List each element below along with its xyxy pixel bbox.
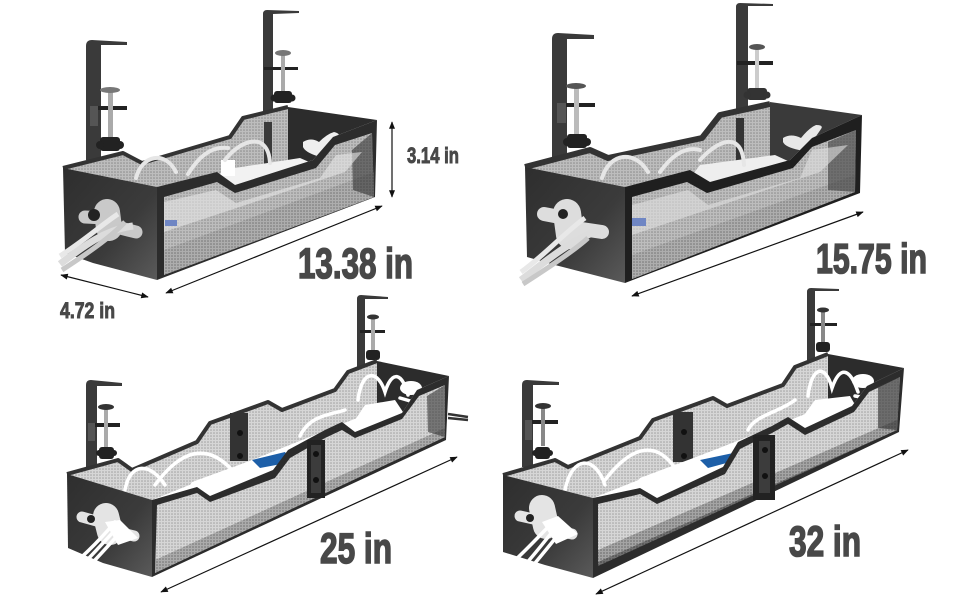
right end wall with heart cut-out bbox=[770, 102, 862, 168]
arrow: length bbox=[166, 206, 382, 293]
keyhole cut-out bbox=[520, 508, 572, 534]
left end panel bbox=[67, 474, 152, 577]
clamp: back left bbox=[86, 380, 122, 467]
back mesh wall bbox=[525, 102, 770, 187]
back bracket bbox=[230, 413, 248, 461]
front mesh panel bbox=[152, 376, 449, 577]
back rail bbox=[63, 107, 288, 168]
right end wall with heart cut-out bbox=[288, 107, 377, 168]
inner bracket bbox=[264, 122, 272, 167]
power strip and cables bbox=[136, 142, 316, 190]
arrow: length bbox=[632, 212, 863, 296]
power strips and cables bbox=[565, 371, 890, 498]
cables exiting bbox=[55, 520, 138, 596]
arrow: length bbox=[161, 457, 457, 592]
back bracket bbox=[673, 412, 693, 462]
clamp: back left bbox=[86, 40, 127, 160]
product: 15.75 inch tray bbox=[521, 3, 927, 296]
back rail bbox=[525, 104, 770, 167]
back mesh wall bbox=[67, 361, 377, 500]
cable end at right bbox=[448, 414, 468, 420]
left end panel bbox=[63, 168, 157, 280]
product: 13.38 inch tray bbox=[60, 10, 459, 323]
left end panel bbox=[525, 167, 625, 283]
keyhole cut-out bbox=[85, 209, 136, 232]
clamp: back left bbox=[522, 380, 559, 467]
front mesh panel bbox=[625, 115, 862, 283]
label: width: 4.72 in bbox=[60, 298, 115, 323]
label: height: 3.14 in bbox=[407, 143, 459, 168]
keyhole cut-out bbox=[544, 209, 602, 235]
cables exiting bbox=[60, 214, 133, 270]
power strip and cables bbox=[602, 142, 790, 185]
product: 32 inch tray bbox=[500, 288, 908, 598]
arrow: height bbox=[391, 122, 393, 197]
cables exiting bbox=[521, 218, 600, 284]
label: length: 13.38 in bbox=[298, 240, 413, 288]
label: length: 32 in bbox=[789, 518, 861, 566]
product: 25 inch tray bbox=[55, 295, 468, 596]
left end panel bbox=[503, 475, 593, 578]
front mesh panel bbox=[593, 368, 904, 578]
power strips and cables bbox=[125, 376, 434, 500]
back mesh wall bbox=[63, 107, 288, 187]
right end wall with cut-out bbox=[828, 354, 904, 420]
front bracket bbox=[753, 435, 775, 500]
clamp: back right bbox=[807, 288, 839, 360]
arrow: length bbox=[596, 450, 908, 594]
front mesh panel bbox=[157, 120, 377, 280]
label: length: 25 in bbox=[320, 525, 392, 573]
right end wall with cut-out bbox=[377, 361, 449, 425]
front bracket bbox=[307, 440, 325, 498]
cables exiting bbox=[500, 516, 578, 598]
clamp: back right bbox=[357, 295, 388, 367]
back mesh wall bbox=[503, 354, 828, 498]
inner bracket bbox=[736, 118, 744, 163]
clamp: back right bbox=[263, 10, 299, 113]
clamp: back right bbox=[736, 3, 773, 110]
back rail bbox=[67, 361, 377, 474]
back rail bbox=[503, 354, 828, 475]
keyhole cut-out bbox=[82, 515, 134, 536]
clamp: back left bbox=[552, 33, 595, 157]
label: length: 15.75 in bbox=[816, 235, 927, 282]
arrow: width bbox=[61, 275, 148, 297]
